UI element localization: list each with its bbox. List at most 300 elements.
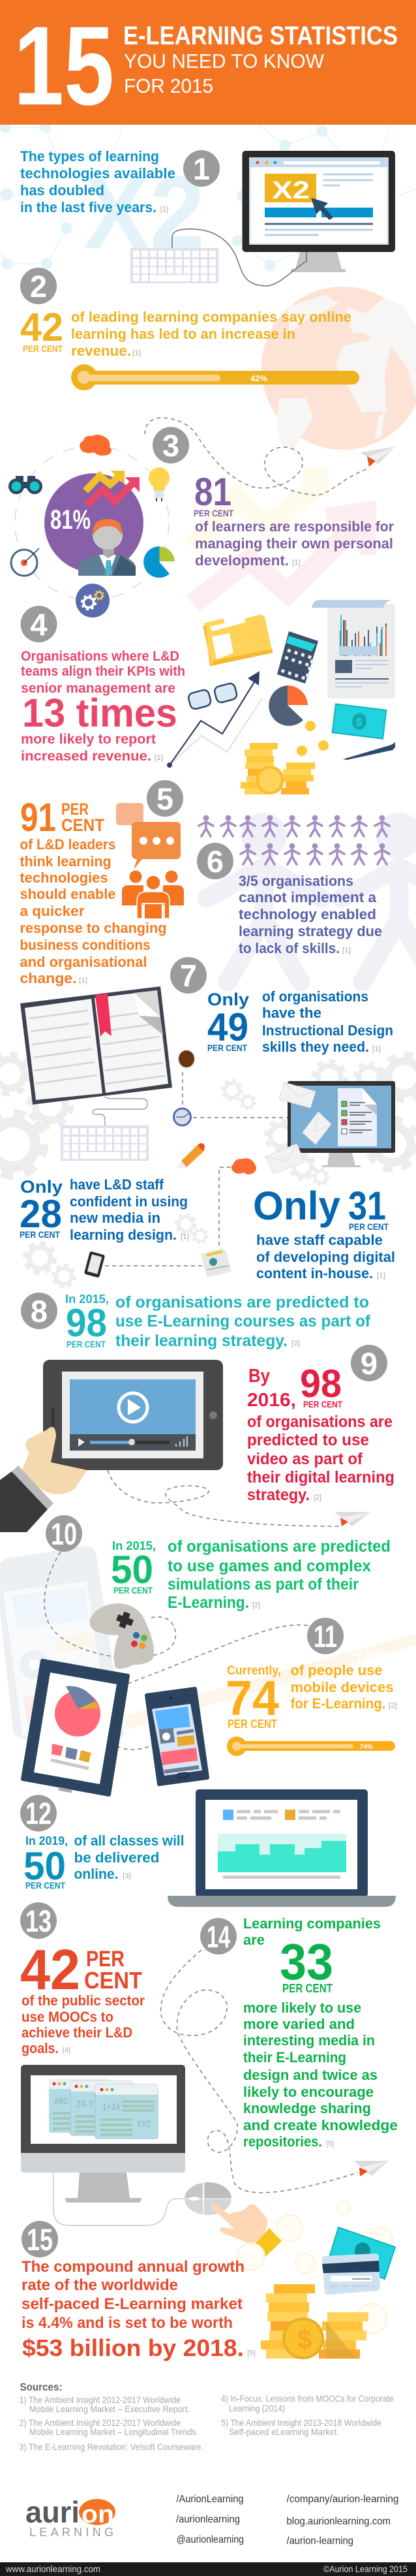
stat 14 text: their E-Learning [243,2049,346,2066]
big purple circle with 81% [44,473,143,573]
badge 10: 10 [51,1516,77,1551]
stat 14 text: repositories. [243,2133,322,2150]
icon: pen [343,742,395,760]
stat 5 number: CENT [61,815,104,835]
badge 9 [351,1345,387,1381]
dashed ring [15,446,169,600]
icon: monitor with browser windows: ABC [54,2096,68,2106]
icon: tablet with video in hand [0,1360,223,1532]
dashed path to plane [108,1470,340,1526]
stat 11 text: of people use [291,1662,382,1678]
panel: statistic 2 [20,268,416,450]
stat 3 text: managing their own personal [195,535,393,552]
stat 15 text [22,2258,256,2361]
social links: @aurionlearning [176,2534,244,2545]
stat 14 text [243,2000,398,2150]
badge 5: 5 [156,781,173,816]
background: faint 74 per cent bar [125,1633,416,1730]
icon: monitor with X2 page [243,151,395,272]
stat 5 text: response to changing [20,920,167,936]
icon: calculator [277,631,318,683]
panel: statistic 9 [0,1345,394,1532]
stat 9 text: video as part of [247,1450,363,1468]
sources list: 4) In-Focus: Lessons from MOOCs for Corporate [221,2393,394,2404]
stat 7b text: [1] [181,1233,189,1241]
stat 1 text: in the last five years. [20,199,156,215]
stat 3 text [195,518,394,569]
stat 7b: only 28 number: Only [20,1177,63,1197]
stat 8 number: 98 [66,1301,107,1345]
stat 7 text [262,988,393,1055]
badge 8: 8 [31,1294,48,1328]
icon: laptop with chart [168,1789,396,1907]
stat 13 number: 42 [20,1938,80,2002]
icon: folder [203,614,273,666]
progress bar 74% [227,1736,395,1756]
icon: coin stack [241,743,315,794]
sources list [20,2393,394,2452]
icon: falling coins [297,721,329,756]
stat 2 text: revenue. [71,343,131,359]
stat 7b: only 28 number: PER CENT [20,1229,60,1240]
stat 5 text: of L&D leaders [20,836,116,853]
stat 7b: only 28 number: 28 [20,1192,62,1236]
stat 10 number: 50 [111,1548,153,1592]
stat 7c text: [1] [377,1272,385,1280]
logo: Aurion Learning: auri [25,2495,80,2529]
badge 12: 12 [25,1796,52,1830]
stat 10 text: E-Learning. [168,1594,249,1612]
badge 3 [153,427,189,463]
stat 12 number: PER CENT [25,1880,65,1891]
sources list: 3) The E-Learning Revolution: Velsoft Courseware. [20,2442,203,2452]
icon: tablet with pie chart [23,1661,128,1795]
icon: keyboard [130,248,218,283]
stat 9 text: their digital learning [247,1468,394,1486]
stat 7c: only 31: 31 [348,1184,386,1228]
stat 14 text: [5] [326,2140,334,2148]
header banner [0,0,416,129]
badge 1 [183,150,220,187]
stat 3 text: of learners are responsible for [195,518,394,535]
stat 5 number: 91 [20,795,56,840]
stat 5 text: [1] [79,977,87,984]
stat 11 text: for E-Learning. [291,1695,386,1712]
stat 7 number: 49 [207,1005,248,1049]
stat 8 text: use E-Learning courses as part of [115,1312,371,1330]
stat 8 text: [2] [291,1340,300,1347]
icon: banknote 2 [329,2227,395,2279]
stat 12 text: online. [74,1866,119,1882]
stat 4 text: senior management are [21,680,175,696]
stat 1 text [20,148,175,215]
panel: statistic 6 [197,815,389,956]
stat 7b text [70,1176,189,1243]
badge 8 [21,1293,57,1329]
stat 2 text: learning has led to an increase in [71,326,295,342]
stat 4 text: Organisations where L&D [21,648,179,664]
icon: light bulb [149,467,170,501]
stat 7b text: new media in [70,1210,160,1226]
icon: brain 2 [231,1158,256,1174]
sources list: Mobile Learning Market – Executive Report. [29,2404,190,2414]
stat 10 text: simulations as part of their [168,1575,359,1594]
stat 9 text: strategy. [247,1486,310,1504]
stat 14 number: 33 [280,1933,333,1990]
stat 13 number [20,1938,142,2002]
stat 14 text: more likely to use [243,2000,361,2016]
stat 12 text: [3] [123,1872,131,1880]
stat 5 text: and organisational [20,954,147,970]
stat 3 text: [1] [292,559,301,567]
panel: statistic 3 [8,418,395,618]
stat 14 text: likely to encourage [243,2084,374,2100]
stat 4 text: 13 times [22,691,177,735]
badge 4: 4 [30,607,48,642]
dashed paths around controller [44,1552,175,1657]
stat 12 number: 50 [23,1844,66,1888]
stat 1 text: technologies available [20,165,175,181]
badge 7: 7 [180,958,197,993]
badge 2 [20,268,57,304]
stat 6 text: 3/5 organisations [239,873,353,889]
icon: report with bar chart [312,600,395,699]
icon: credit card [322,2254,380,2295]
stat 7c text: content in-house. [256,1265,373,1281]
stat 10 text: [2] [252,1601,260,1609]
stat 13 text: [4] [63,2047,70,2054]
stat 7 text: of organisations [262,988,368,1005]
stat 5 text [20,836,167,986]
stat 7c text: have staff capable [256,1232,383,1248]
stat 13 text: use MOOCs to [22,2009,113,2025]
stat 15 text: is 4.4% and is set to be worth [22,2314,233,2332]
book cable [93,1097,147,1125]
sources list: Mobile Learning Market – Longitudinal Trends. [29,2427,198,2437]
stat 13 number: PER [86,1947,125,1971]
stat 7c: only 31: Only [253,1184,340,1228]
footer bar [0,2562,416,2576]
logo: Aurion Learning: LEARNING [29,2526,113,2539]
stat 9 number: PER CENT [303,1399,342,1409]
social links: blog.aurionlearning.com [287,2516,391,2527]
social links [176,2494,399,2547]
stat 7 number: PER CENT [207,1043,247,1053]
stat 12 text: of all classes will [74,1832,184,1849]
badge 1: 1 [193,151,210,186]
stat 13 text: achieve their L&D [22,2024,132,2041]
icon: glasses [187,682,238,710]
footer bar: ©Aurion Learning 2015 [323,2564,408,2574]
panel: statistic 10 [44,1515,391,1669]
sources list: 5) The Ambient Insight 2013-2018 Worldwide [221,2417,381,2428]
stat 7 number: Only [207,990,249,1009]
icon: gears circle [76,584,110,618]
stat 15 text: The compound annual growth [22,2258,245,2276]
stat 15 text: rate of the worldwide [22,2276,178,2294]
stat 11 text [291,1662,397,1712]
stat 15 text: $53 billion by 2018. [22,2334,244,2361]
stat 9 text: [2] [314,1494,321,1501]
subtitle [124,50,325,97]
icon: group of people [122,871,184,919]
icon: pie [269,685,308,726]
footer bar: www.aurionlearning.com [5,2564,100,2574]
panel: statistic 1 [20,148,395,286]
stat 2 text: [1] [132,349,141,357]
icon: coin stack 2: $ [297,2325,312,2354]
stat 12 number: In 2019, [25,1834,68,1847]
stat 14 intro: Learning companies [243,1915,381,1932]
stat 13 text: goals. [22,2040,59,2056]
stat 6 text: to lack of skills. [239,940,340,956]
stat 9 number: 2016, [247,1390,296,1411]
background: faint 74 per cent bar: 74% [351,1642,389,1670]
stat 11 text: mobile devices [291,1679,394,1695]
icon: monitor with checklist [288,1081,395,1167]
stat 7b text: confident in using [70,1193,188,1210]
stat 14 text: interesting media in [243,2032,375,2049]
stat 9 text: of organisations are [247,1413,393,1431]
stat 8 number: PER CENT [67,1339,106,1349]
stat 14 text: design and twice as [243,2067,378,2083]
stat 7b text: have L&D staff [70,1176,164,1193]
icon: clock [173,1108,190,1125]
stat 2 number: PER CENT [23,343,63,354]
stat 12 text: be delivered [74,1849,159,1866]
logo: Aurion Learning [25,2495,115,2539]
badge 4 [21,606,57,642]
social links: /company/aurion-learning [287,2494,399,2505]
background: faint phone watermark [0,1546,124,1739]
dashed path with loops to plane [161,1950,358,2193]
panel: statistic 5 [20,780,184,986]
icon: monitor with browser windows: 2X-Y [76,2098,95,2109]
faint dollar coins [237,2201,393,2334]
stat 10 number: In 2015, [112,1539,156,1552]
icons: envelopes [265,1082,331,1174]
progress bar 42%: 42% [250,373,267,383]
stat 11 number: PER CENT [228,1718,277,1731]
background: arrows watermark [193,479,368,604]
panel: statistic 7 [20,957,395,1281]
stat 4 text: [1] [155,754,163,762]
subtitle: YOU NEED TO KNOW [124,50,325,72]
social links: /aurionlearning [176,2514,240,2525]
stat 10 text: to use games and complex [168,1557,371,1575]
stat 5 number: PER [61,800,89,819]
stat 4 text [21,648,185,764]
panel: statistic 11 [23,1618,397,1795]
stat 8 text: their learning strategy. [115,1332,288,1350]
panel: statistic 12 [20,1789,396,1907]
icon: banknote [333,704,386,739]
stat 6 text [239,873,382,956]
stat 4 text: increased revenue. [21,748,151,764]
icon: paper plane 2 [334,1512,370,1526]
stat 6 text: learning strategy due [239,923,382,939]
icon: smartphone with app screen [147,1689,207,1784]
sources list: Self-paced eLearning Market. [229,2427,339,2437]
stat 7c: only 31 [253,1184,389,1232]
stat 3 text: development. [195,552,289,569]
icon: pencil [177,1143,205,1169]
icon: open book [20,986,172,1105]
people pictogram [199,815,389,864]
stat 14 text: and create knowledge [243,2117,398,2133]
stat 10 text: of organisations are predicted [168,1537,391,1556]
stat 7c text: of developing digital [256,1249,395,1265]
icon: speech bubbles [116,803,181,870]
stat 5 text: business conditions [20,937,150,953]
stat 14 intro: are [243,1932,265,1948]
big purple circle with 81%: 81% [50,504,91,535]
stat 9 number: 98 [300,1362,342,1406]
icon: pie chart [143,546,175,578]
stat 14 number: PER CENT [282,1982,333,1995]
logo: Aurion Learning: on [82,2501,114,2528]
icon: binoculars [8,476,42,494]
sources heading: Sources: [20,2381,63,2393]
stat 1 text: The types of learning [20,148,159,165]
dashed path to tablet [117,1625,308,1750]
badge 6 [197,843,233,879]
globe watermark [261,287,416,450]
stat 5 text: change. [20,970,77,986]
background: people watermark [207,813,416,982]
panel: statistic 4 [21,600,395,794]
progress bar 42% [71,364,359,390]
header number 15: 15 [14,3,114,129]
stat 5 text: think learning [20,853,111,870]
stat 15 text: [5] [247,2349,256,2357]
stat 9 number: By [248,1366,270,1387]
badge 7 [170,957,207,994]
stat 9 number [247,1362,342,1411]
stat 1 text: has doubled [20,182,104,198]
stat 4 text: more likely to report [21,731,156,747]
stat 14 text: knowledge sharing [243,2100,371,2116]
stat 13 text: of the public sector [22,1992,145,2009]
sources list: 2) The Ambient Insight 2012-2017 Worldwide [20,2417,181,2428]
background: faint network pattern [0,122,416,270]
icon: business person [78,519,136,576]
stat 7 number [207,990,249,1053]
icon: banknote: $ [355,715,363,729]
progress bar 74%: 74% [360,1744,373,1751]
panel: statistic 15 [22,2201,395,2361]
stat 15 text: self-paced E-Learning market [22,2295,243,2313]
stat 5 text: a quicker [20,903,85,919]
stat 8 number: In 2015, [65,1293,109,1306]
stat 7b: only 28 number [20,1177,63,1240]
icon: coffee cup [177,1050,196,1069]
badge 2: 2 [30,269,47,304]
badge 5 [147,780,183,817]
stat 3 number: PER CENT [194,508,233,518]
badge 15: 15 [27,2222,53,2257]
icon: monitor with browser windows: XYZ [137,2118,151,2129]
stat 5 text: should enable [20,886,116,902]
stat 14 intro [243,1915,381,1948]
stat 7 text: Instructional Design [262,1022,393,1039]
stat 6 text: cannot implement a [239,889,377,905]
stat 7c: only 31: PER CENT [349,1221,389,1232]
dashed flight path to paper plane [145,418,369,495]
stat 3 number: 81 [194,470,231,514]
stat 11 number: 74 [226,1671,279,1725]
panel: statistic 14 [161,1915,398,2193]
stat 7 text: have the [262,1005,321,1021]
panel: statistic 8 [21,1293,371,1350]
badge 6: 6 [207,844,224,879]
icon: rising arrows [85,471,140,505]
icon: mouse and pointing hand [185,2182,282,2258]
icon: monitor with browser windows: 1+3X [102,2101,121,2112]
background: X2 watermark: X2 [83,155,205,270]
icon: game controller [90,1603,154,1669]
mouse cable [53,2173,192,2225]
stat 2 text [71,309,351,359]
keyboard cable [172,229,306,286]
icon: monitor with browser windows [21,2065,185,2203]
dashed connectors [105,1072,288,1266]
icon: monitor with X2 page: X2 [272,177,310,204]
stat 1 text: [1] [160,206,168,213]
icon: brain [80,435,111,456]
sources list: Learning (2014) [229,2403,285,2413]
icon: gauge [11,548,39,576]
panel: sources [20,2381,394,2452]
stat 8 text [115,1293,371,1350]
stat 12 text [74,1832,184,1882]
stat 8 text: of organisations are predicted to [115,1293,369,1312]
sources list: 1) The Ambient Insight 2012-2017 Worldwide [20,2395,181,2405]
stat 9 text: predicted to use [247,1431,369,1449]
stat 13 text [22,1992,145,2056]
stat 5 text: technologies [20,870,108,886]
badge 14: 14 [207,1919,230,1954]
badge 13: 13 [25,1904,52,1938]
subtitle: FOR 2015 [124,74,213,97]
stat 10 number: PER CENT [113,1585,153,1595]
badge 11: 11 [314,1619,337,1654]
icon: coin stack 2 [261,2284,368,2359]
stat 9 text [247,1413,394,1504]
stat 2 number: 42 [20,305,63,349]
social links: /aurion-learning [287,2536,353,2547]
stat 6 text: [1] [342,947,351,954]
stat 5 number [20,795,104,840]
stat 11 text: [2] [389,1702,397,1710]
badge 3: 3 [162,428,179,463]
social links: /AurionLearning [176,2494,244,2505]
stat 13 number: CENT [84,1967,142,1994]
icon: smartphone [84,1251,105,1278]
stat 7c text [256,1232,395,1281]
arrow line chart [167,671,260,768]
background: gears watermark [0,1054,416,1287]
stat 4 text: teams align their KPIs with [21,663,185,679]
stat 7 text: skills they need. [262,1039,369,1055]
panel: statistic 13 [20,1902,282,2258]
badge 9: 9 [361,1346,378,1381]
grey line chart [170,699,262,765]
stat 10 text [168,1537,391,1612]
stat 2 text: of leading learning companies say online [71,309,351,325]
stat 7 text: [1] [372,1045,381,1053]
icon: document with pie [201,1248,231,1278]
